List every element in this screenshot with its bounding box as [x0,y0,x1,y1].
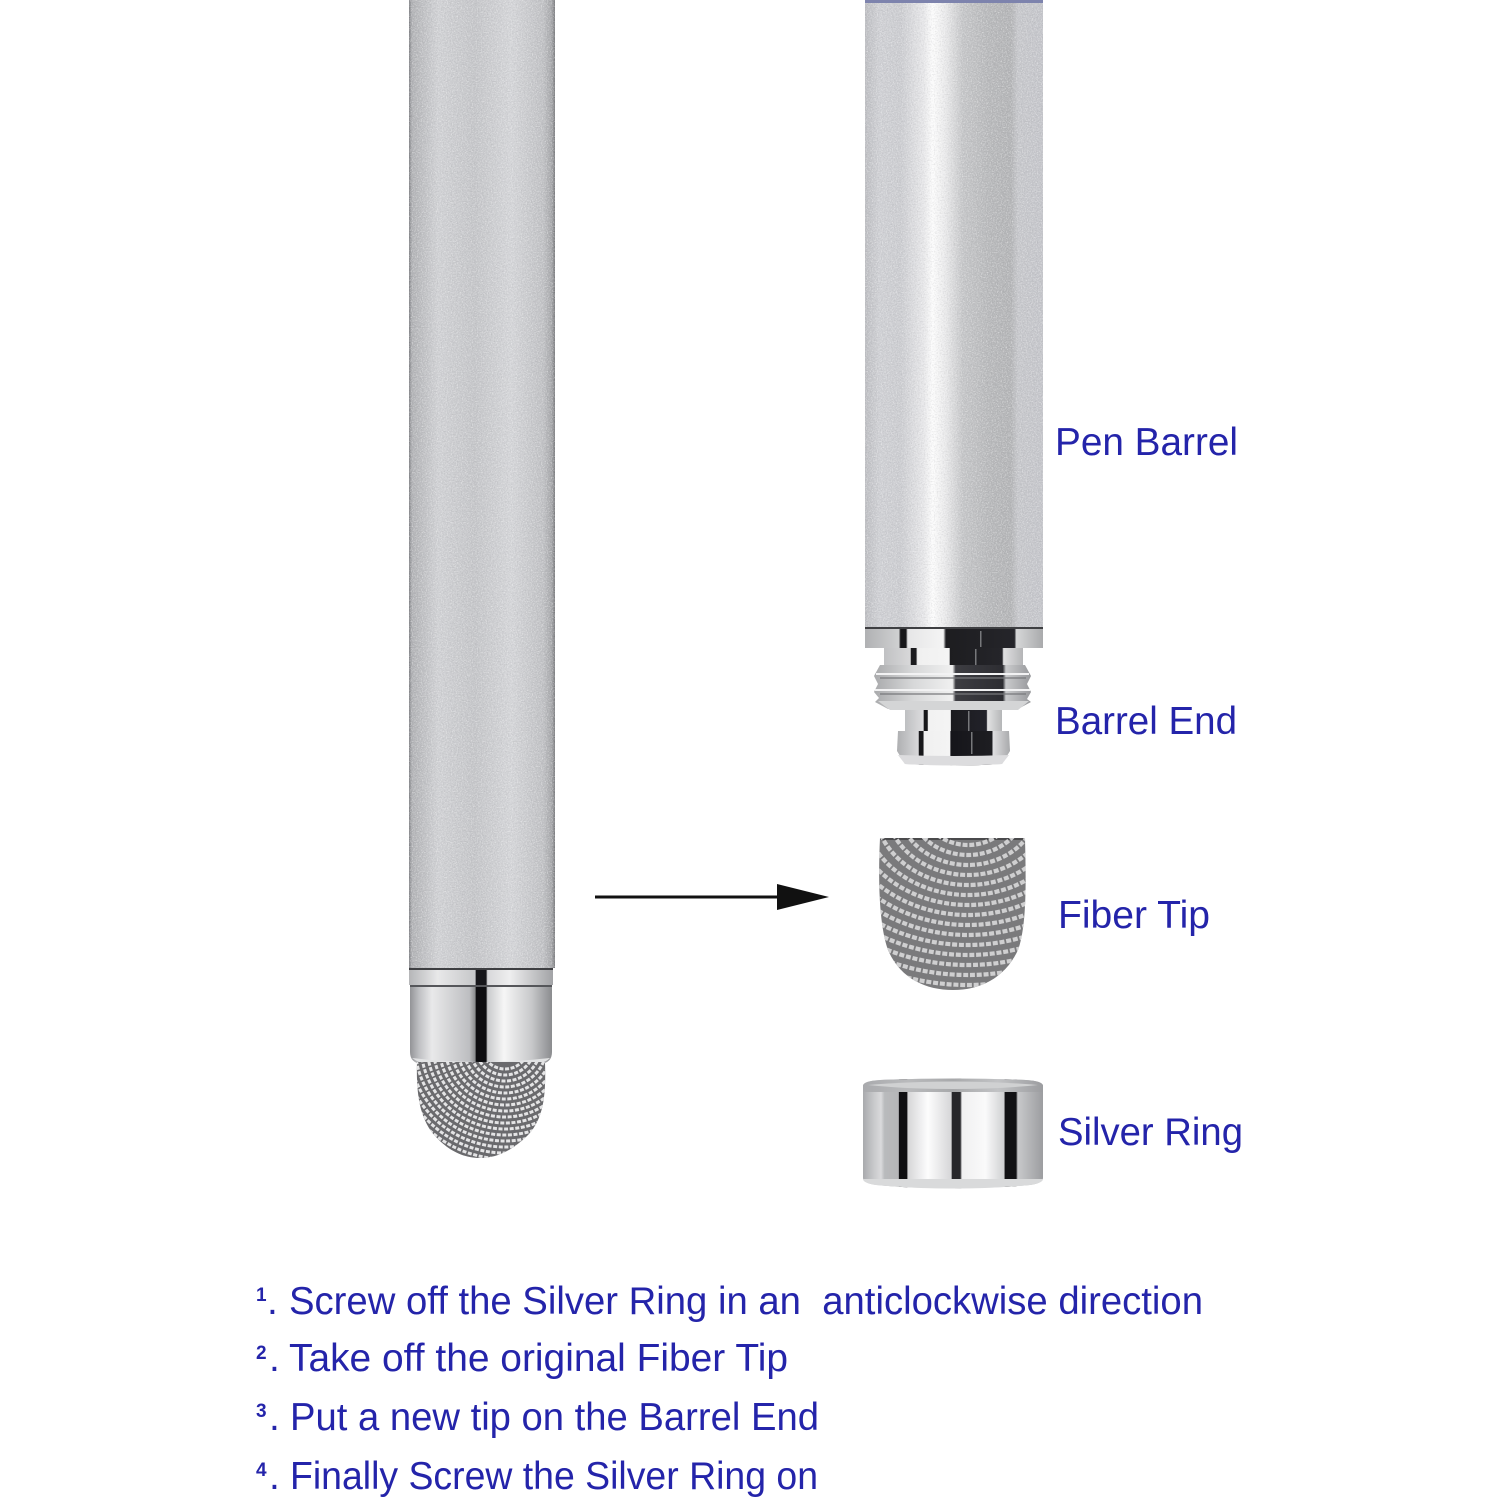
woven fiber tip of assembled stylus [416,1062,546,1158]
barrel of assembled stylus [409,0,555,968]
fiber tip part [879,838,1026,990]
label: Pen Barrel: Pen Barrel [1055,421,1238,464]
step 1: . [267,1280,278,1323]
infographic canvas [256,0,1241,1497]
end cap [897,731,1010,766]
step 1: 1 [256,1285,267,1306]
step 2: Take off the original Fiber Tip [289,1337,788,1380]
silver ring part [863,1078,1043,1188]
step 4: . [269,1455,280,1498]
label: Silver Ring: Silver Ring [1058,1111,1243,1154]
arrow from stylus to exploded view [595,884,829,910]
step 3: . [269,1396,280,1439]
step 4: Finally Screw the Silver Ring on [290,1455,818,1498]
lower neck [905,710,1002,732]
step 3: Put a new tip on the Barrel End [290,1396,819,1439]
silver collar of assembled stylus [409,968,553,1064]
screw thread [874,665,1031,710]
pen barrel part [865,0,1043,628]
assembled stylus (left) [409,0,555,1158]
step 3: 3 [256,1401,267,1422]
instructions text block [256,1280,1203,1498]
label: Fiber Tip: Fiber Tip [1058,894,1210,937]
barrel end part [865,627,1043,766]
step 2: . [269,1337,280,1380]
label: Barrel End: Barrel End [1055,700,1237,743]
upper collar [865,627,1043,648]
step 4: 4 [256,1460,267,1481]
step 2: 2 [256,1343,267,1364]
step 1: Screw off the Silver Ring in an anticlockwise direction [289,1280,1203,1323]
upper neck [884,648,1023,666]
